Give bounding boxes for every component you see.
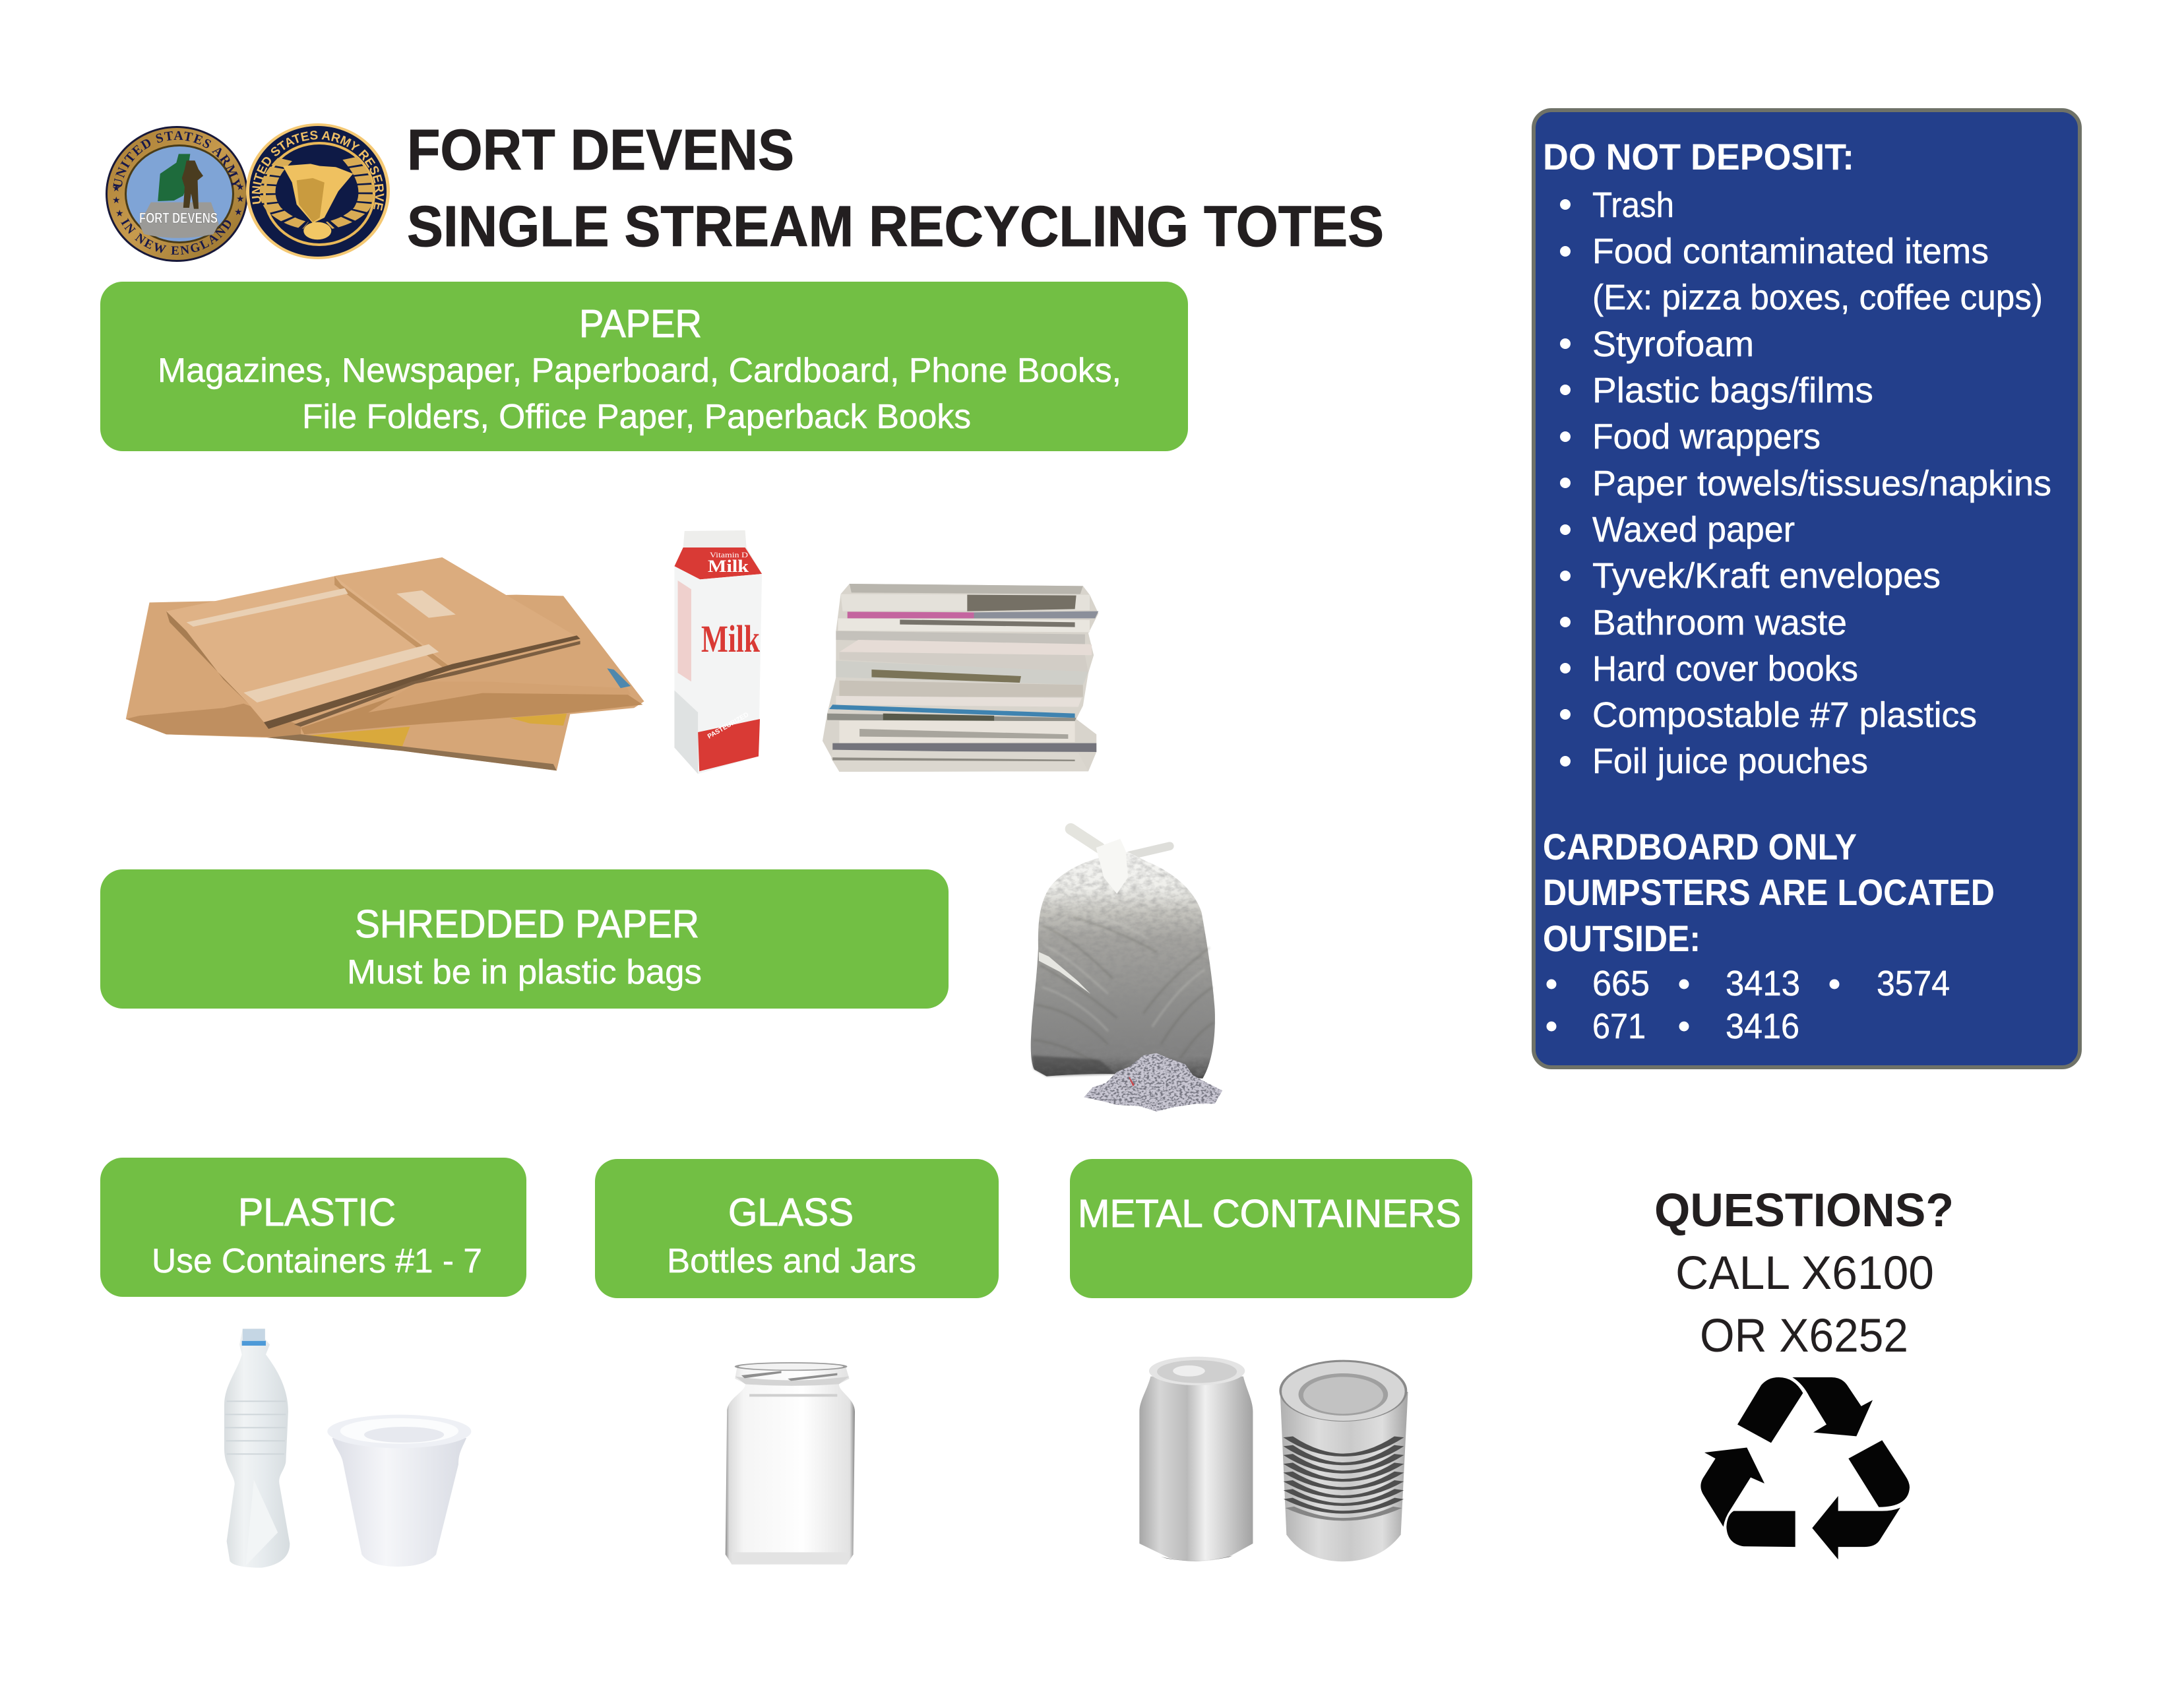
image: tin can	[1279, 1360, 1408, 1561]
logo: Fort Devens seal: ★	[234, 206, 243, 217]
image: milk carton: PASTEURIZED	[706, 711, 750, 741]
list: dumpster buildings	[1546, 964, 1950, 1046]
text: questions contact	[1654, 1185, 1954, 1362]
logo: Army Reserve seal: UNITED STATES ARMY RESERVE	[252, 131, 384, 211]
heading: cardboard only dumpsters: CARDBOARD ONLY	[1543, 826, 1857, 867]
text: questions contact: CALL X6100	[1675, 1247, 1934, 1299]
list: prohibited items: Trash	[1592, 185, 1674, 225]
image: glass jar	[726, 1363, 855, 1565]
panel: plastic	[100, 1158, 526, 1297]
list: prohibited items: Paper towels/tissues/napkins	[1592, 464, 2051, 503]
list: prohibited items: Plastic bags/films	[1592, 371, 1873, 410]
panel: paper: File Folders, Office Paper, Paperback Books	[302, 398, 971, 436]
icon: recycling symbol	[1700, 1377, 1910, 1559]
logo: Fort Devens seal: UNITED STATES ARMY	[113, 131, 240, 187]
image: stack of newspapers	[823, 584, 1098, 772]
list: dumpster buildings: 3413	[1726, 964, 1800, 1003]
panel: do not deposit	[1534, 110, 2080, 1067]
image: milk carton: Milk	[701, 617, 761, 660]
logo: Fort Devens seal: ★	[236, 193, 245, 204]
panel: shredded paper: SHREDDED PAPER	[355, 902, 699, 946]
panel: metal containers: METAL CONTAINERS	[1078, 1192, 1461, 1235]
image: pile of shredded paper	[1084, 1053, 1222, 1111]
image: milk carton: Milk	[708, 557, 749, 576]
image: bag of shredded paper	[1031, 829, 1215, 1078]
panel: shredded paper: Must be in plastic bags	[347, 953, 702, 991]
heading: cardboard only dumpsters: OUTSIDE:	[1543, 918, 1700, 959]
list: prohibited items: Bathroom waste	[1592, 603, 1847, 642]
list: prohibited items	[1560, 185, 2051, 781]
heading: do not deposit: DO NOT DEPOSIT:	[1543, 136, 1854, 177]
heading: cardboard only dumpsters	[1543, 826, 1995, 959]
logo: Fort Devens seal: ★	[112, 183, 121, 193]
list: prohibited items: Hard cover books	[1592, 649, 1858, 689]
panel: shredded paper	[100, 869, 949, 1009]
panel: paper	[100, 282, 1188, 451]
image: milk carton	[674, 530, 762, 774]
logo: Fort Devens seal: ★	[115, 208, 124, 218]
logo: Fort Devens seal: ★	[236, 181, 245, 192]
heading: cardboard only dumpsters: DUMPSTERS ARE LOCATED	[1543, 871, 1995, 913]
title: SINGLE STREAM RECYCLING TOTES	[407, 195, 1384, 259]
panel: metal containers	[1070, 1159, 1472, 1298]
text: questions contact: OR X6252	[1700, 1310, 1908, 1362]
image: milk carton: Vitamin D	[710, 550, 748, 559]
logo: Fort Devens seal: FORT DEVENS	[139, 210, 218, 226]
text: questions contact: QUESTIONS?	[1654, 1185, 1954, 1237]
panel: glass	[595, 1159, 999, 1298]
panel: plastic: PLASTIC	[238, 1191, 396, 1234]
list: dumpster buildings: 3574	[1877, 964, 1950, 1003]
image: aluminum can	[1139, 1357, 1253, 1561]
title: FORT DEVENS	[407, 118, 794, 182]
list: prohibited items: Styrofoam	[1592, 325, 1754, 364]
list: prohibited items: Food wrappers	[1592, 417, 1821, 456]
panel: glass: GLASS	[728, 1191, 854, 1234]
panel: paper: PAPER	[579, 302, 702, 346]
title	[407, 118, 1384, 259]
panel: paper: Magazines, Newspaper, Paperboard, Cardboard, Phone Books,	[158, 352, 1121, 390]
logo: Fort Devens seal	[106, 126, 247, 262]
logo: Fort Devens seal: IN NEW ENGLAND	[121, 218, 231, 255]
logo: Fort Devens seal: ★	[112, 195, 121, 205]
image: flattened cardboard boxes	[126, 557, 644, 770]
list: dumpster buildings: 665	[1592, 964, 1650, 1003]
list: prohibited items: Compostable #7 plastics	[1592, 695, 1977, 735]
logo: Army Reserve seal	[246, 123, 390, 259]
list: prohibited items: Food contaminated items	[1592, 232, 1989, 271]
list: dumpster buildings: 671	[1592, 1007, 1646, 1046]
list: prohibited items: Waxed paper	[1592, 510, 1795, 549]
image: white plastic cup	[327, 1415, 471, 1567]
list: dumpster buildings: 3416	[1726, 1007, 1799, 1046]
image: plastic water bottle	[224, 1329, 290, 1568]
panel: plastic: Use Containers #1 - 7	[152, 1242, 482, 1280]
panel: glass: Bottles and Jars	[667, 1242, 916, 1280]
list: prohibited items: (Ex: pizza boxes, coffee cups)	[1592, 278, 2043, 317]
list: prohibited items: Tyvek/Kraft envelopes	[1592, 556, 1941, 596]
list: prohibited items: Foil juice pouches	[1592, 741, 1868, 781]
